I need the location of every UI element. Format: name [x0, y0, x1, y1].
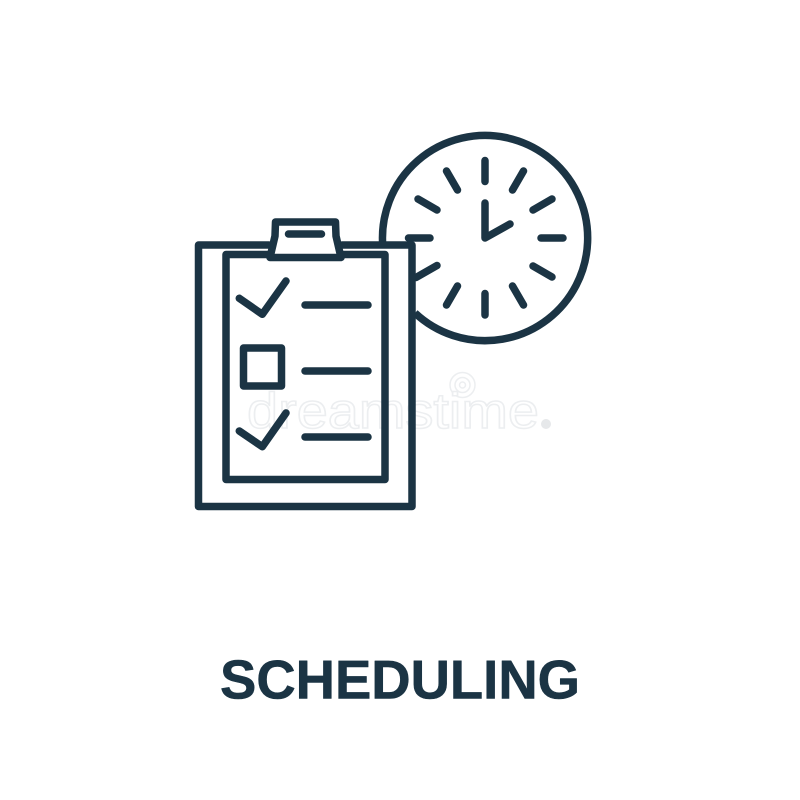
checklist row 2: empty checkbox — [244, 348, 282, 386]
clipboard board — [198, 245, 412, 506]
watermark dot — [541, 419, 551, 429]
clock tick marks — [408, 160, 563, 315]
icon: clipboard — [198, 222, 412, 506]
clipboard paper — [226, 254, 385, 480]
clipboard clip — [270, 222, 341, 258]
watermark spiral logo — [450, 372, 475, 398]
checklist row 3: line — [305, 433, 368, 441]
checklist row 1: line — [305, 301, 368, 309]
checklist row 2: line — [305, 367, 368, 375]
icon: clock — [382, 135, 588, 341]
clock outline — [382, 135, 588, 341]
clock hands — [485, 203, 510, 238]
checklist row 3: check mark — [239, 413, 286, 447]
title: SCHEDULING — [220, 650, 580, 710]
watermark text: dreamstime — [247, 383, 539, 439]
checklist row 1: check mark — [239, 281, 286, 314]
watermark — [247, 372, 551, 439]
clip slot — [288, 230, 322, 238]
